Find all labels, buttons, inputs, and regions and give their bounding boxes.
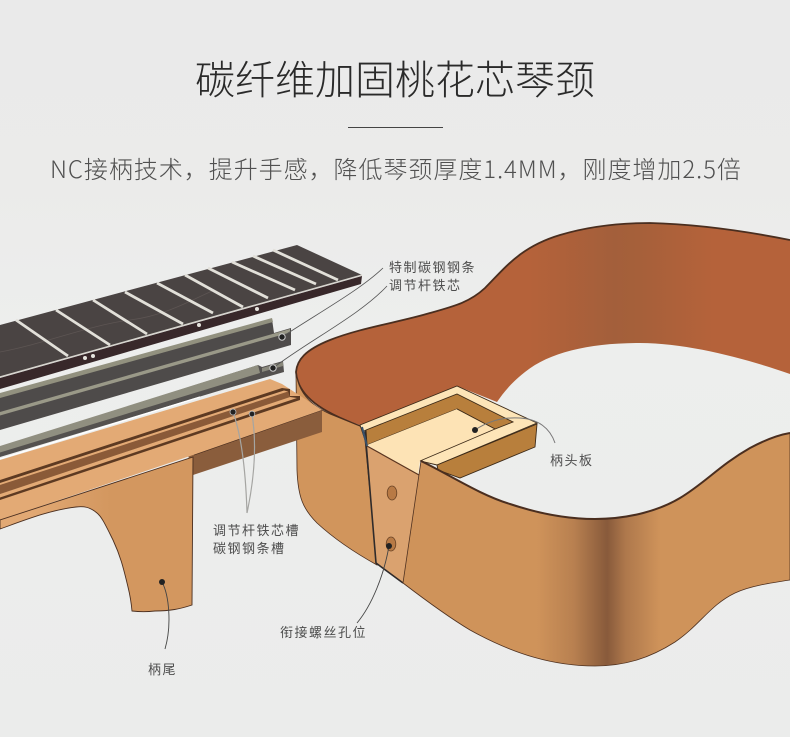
left side panel — [296, 372, 377, 565]
neck wood — [0, 379, 322, 612]
block cavity back walls — [366, 394, 513, 445]
subtitle: NC接柄技术，提升手感，降低琴颈厚度1.4MM，刚度增加2.5倍 — [50, 150, 742, 185]
neck heel — [0, 457, 193, 612]
truss rod core — [0, 361, 284, 459]
callout: slots: 碳钢钢条槽 — [213, 541, 286, 556]
title: 碳纤维加固桃花芯琴颈 — [195, 48, 595, 106]
fretboard grain — [0, 290, 215, 352]
callout: screw holes: 衔接螺丝孔位 — [280, 625, 367, 640]
callout: truss rod core: 调节杆铁芯 — [389, 278, 462, 293]
frets — [16, 250, 338, 356]
truss rod groove — [0, 391, 290, 494]
callout: heel: 柄尾 — [148, 662, 177, 677]
groove band — [0, 388, 300, 500]
callout: screw holes — [280, 543, 392, 640]
neck top surface — [0, 379, 322, 520]
callout: slots — [213, 409, 300, 556]
carbon steel bar — [0, 318, 291, 430]
guitar body — [296, 223, 790, 666]
joint plate — [362, 427, 419, 583]
front side panel — [403, 433, 790, 666]
fretboard — [0, 245, 362, 389]
callout: head plate: 柄头板 — [550, 453, 594, 468]
neck end face — [188, 410, 322, 475]
callout: carbon steel strip: 特制碳钢钢条 — [389, 260, 476, 275]
screw hole lower — [386, 537, 396, 551]
callout: truss rod core — [270, 278, 462, 371]
inlay dots — [83, 307, 259, 360]
block top rim — [360, 386, 537, 465]
callout: carbon steel strip — [279, 260, 476, 340]
fretboard top — [0, 245, 362, 377]
callout: heel — [148, 579, 177, 677]
block front side face — [437, 424, 537, 478]
screw hole upper — [387, 486, 397, 500]
carbon strip groove — [0, 397, 297, 498]
block cavity floor — [367, 409, 495, 475]
grooves — [0, 388, 300, 500]
callout: slots: 调节杆铁芯槽 — [213, 523, 300, 538]
neck block — [360, 386, 537, 478]
callout: head plate — [472, 418, 594, 468]
body interior — [296, 223, 790, 425]
fretboard side — [0, 276, 362, 389]
